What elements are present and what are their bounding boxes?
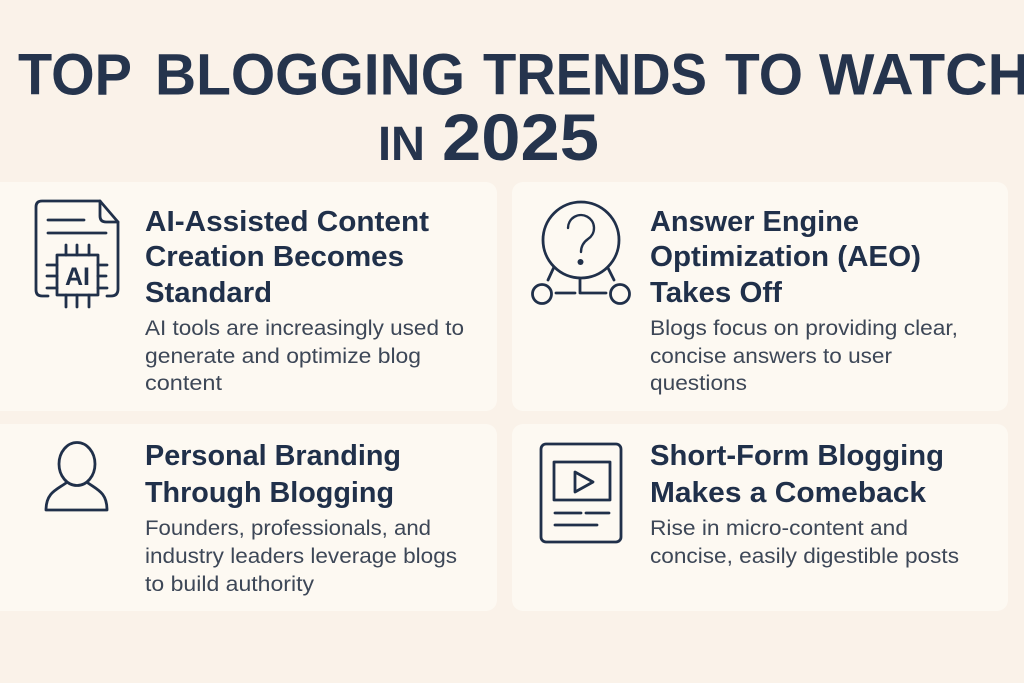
heading: AI-assisted content: AI-Assisted Content — [145, 206, 429, 238]
heading: AI-assisted content: Standard — [145, 277, 272, 309]
title: WATCH — [819, 42, 1024, 108]
icon: video post — [541, 444, 621, 542]
text: AI-assisted content description — [145, 317, 464, 395]
text: answer engine optimization description — [650, 317, 958, 395]
heading: AI-assisted content: Creation Becomes — [145, 241, 404, 273]
text: AI-assisted content description: AI tools are increasingly used to — [145, 317, 464, 340]
title: TOP — [18, 42, 132, 108]
text: short-form blogging description — [650, 517, 959, 568]
heading: short-form blogging: Short-Form Blogging — [650, 440, 944, 472]
heading: answer engine optimization: Answer Engine — [650, 206, 859, 238]
title: TRENDS — [483, 42, 707, 108]
title: BLOGGING — [155, 42, 465, 108]
heading: personal branding: Through Blogging — [145, 477, 394, 509]
heading: answer engine optimization — [650, 206, 921, 309]
text: short-form blogging description: Rise in micro-content and — [650, 517, 908, 540]
text: AI-assisted content description: generate and optimize blog — [145, 345, 421, 368]
text: answer engine optimization description: questions — [650, 372, 747, 395]
heading: AI-assisted content — [145, 206, 429, 309]
heading: personal branding: Personal Branding — [145, 440, 401, 472]
heading: short-form blogging — [650, 440, 944, 509]
text: short-form blogging description: concise, easily digestible posts — [650, 545, 959, 568]
title: TO — [725, 42, 803, 108]
text: personal branding description: industry leaders leverage blogs — [145, 545, 457, 568]
icon: person — [46, 442, 107, 510]
heading: personal branding — [145, 440, 401, 509]
title: IN — [378, 118, 425, 171]
panel: answer engine optimization — [512, 182, 1008, 411]
heading: answer engine optimization: Takes Off — [650, 277, 782, 309]
icon: AI document — [36, 201, 118, 307]
panel: AI-assisted content — [0, 182, 497, 411]
panel: personal branding — [0, 424, 497, 611]
text: personal branding description: to build authority — [145, 573, 315, 596]
text: personal branding description: Founders, professionals, and — [145, 517, 431, 540]
text: answer engine optimization description: concise answers to user — [650, 345, 892, 368]
icon: AI document: AI — [65, 263, 90, 291]
text: answer engine optimization description: Blogs focus on providing clear, — [650, 317, 958, 340]
text: AI-assisted content description: content — [145, 372, 222, 395]
heading: short-form blogging: Makes a Comeback — [650, 477, 927, 509]
heading: answer engine optimization: Optimization (AEO) — [650, 241, 921, 273]
title: 2025 — [442, 100, 599, 174]
icon: question network — [532, 202, 630, 304]
panel: short-form blogging — [512, 424, 1008, 611]
text: personal branding description — [145, 517, 457, 596]
title — [18, 42, 1024, 174]
